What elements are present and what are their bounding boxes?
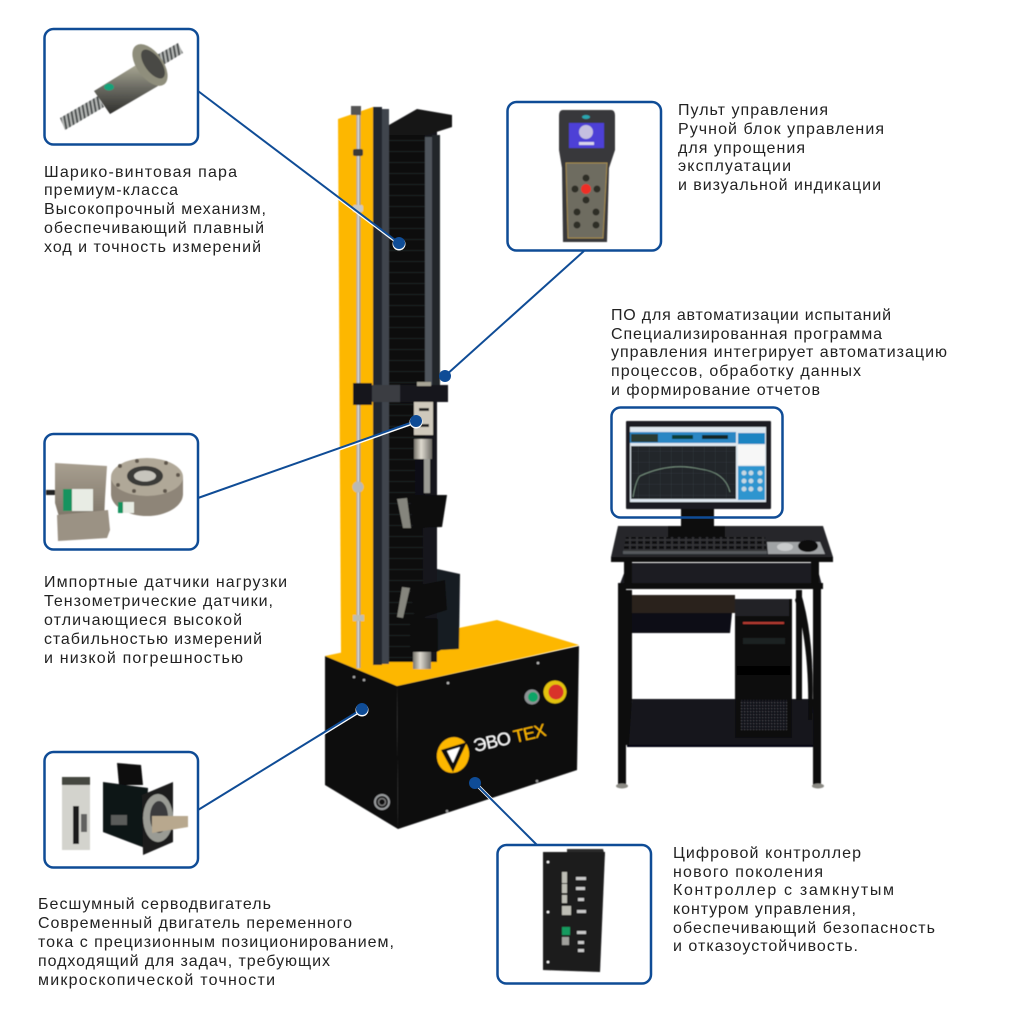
keyboard tray xyxy=(618,562,823,589)
power connector xyxy=(375,795,389,809)
icon: handheld controller xyxy=(559,110,615,242)
lower grip xyxy=(397,580,447,669)
panel: ball screw photo xyxy=(44,29,198,144)
text: software: и формирование отчетов xyxy=(611,382,820,399)
icon: load cells xyxy=(46,458,183,541)
text: load sensors: отличающиеся высокой xyxy=(44,612,242,629)
text: controller: обеспечивающий безопасность xyxy=(673,920,935,937)
text: servo motor xyxy=(38,896,394,989)
logo: ТЕХ xyxy=(511,720,548,747)
panel: load sensor photo xyxy=(44,434,198,550)
text: ball screw: обеспечивающий плавный xyxy=(44,220,264,237)
text: remote control xyxy=(678,102,884,194)
back panel and shelves xyxy=(627,595,813,747)
yellow column xyxy=(338,107,373,668)
panel: remote control photo xyxy=(508,102,661,250)
monitor stand xyxy=(668,509,725,537)
table top xyxy=(611,526,833,562)
text: software: процессов, обработку данных xyxy=(611,363,861,380)
leader: controller xyxy=(469,777,537,845)
button panel xyxy=(524,680,566,704)
text: controller: нового поколения xyxy=(673,864,823,881)
icon: ball screw xyxy=(60,38,183,130)
text: ball screw xyxy=(44,164,266,256)
text: ball screw: ход и точность измерений xyxy=(44,239,261,256)
column frame xyxy=(373,107,440,665)
table legs xyxy=(616,588,824,788)
mouse pad and mouse xyxy=(767,540,825,554)
text: load sensors: и низкой погрешностью xyxy=(44,650,243,667)
text: load sensors: Тензометрические датчики, xyxy=(44,593,273,610)
text: servo motor: тока с прецизионным позиционированием, xyxy=(38,934,394,951)
panel: controller photo xyxy=(498,845,651,984)
guide rod with limit clamps xyxy=(351,106,364,668)
text: load sensors: стабильностью измерений xyxy=(44,631,262,648)
icon: servo drive and motor xyxy=(62,763,188,855)
crosshead xyxy=(353,382,448,405)
text: controller: Цифровой контроллер xyxy=(673,845,861,862)
leader: load sensor xyxy=(198,415,422,500)
text: ball screw: Высокопрочный механизм, xyxy=(44,201,266,218)
leader: ball screw xyxy=(198,91,406,250)
text: servo motor: микроскопической точности xyxy=(38,972,275,989)
text: software: ПО для автоматизации испытаний xyxy=(611,307,891,324)
icon: controller panel xyxy=(543,849,605,972)
text: load sensors: Импортные датчики нагрузки xyxy=(44,574,287,591)
text: controller: Контроллер с замкнутым xyxy=(673,882,894,899)
text: servo motor: Бесшумный серводвигатель xyxy=(38,896,271,913)
text: servo motor: Современный двигатель переменного xyxy=(38,915,352,932)
rear housing xyxy=(437,569,460,652)
testing machine xyxy=(325,106,579,829)
text: ball screw: Шарико-винтовая пара xyxy=(44,164,237,181)
text: software: Специализированная программа xyxy=(611,326,882,343)
monitor xyxy=(626,421,771,509)
text: ball screw: премиум-класса xyxy=(44,182,178,199)
leader: servo motor xyxy=(198,703,368,812)
text: software: управления интегрирует автоматизацию xyxy=(611,344,947,361)
text: remote control: Ручной блок управления xyxy=(678,121,884,138)
logo: ЭВО xyxy=(471,728,513,756)
text: remote control: эксплуатации xyxy=(678,158,791,175)
text: remote control: для упрощения xyxy=(678,140,805,157)
text: controller xyxy=(673,845,935,955)
text: software xyxy=(611,307,947,399)
keyboard xyxy=(623,537,767,554)
workstation table with computer xyxy=(611,421,833,788)
leader: remote control xyxy=(439,251,584,382)
text: controller: контуром управления, xyxy=(673,901,856,918)
text: load sensors xyxy=(44,574,287,667)
text: servo motor: подходящий для задач, требующих xyxy=(38,953,330,970)
top cap xyxy=(389,109,452,135)
text: remote control: Пульт управления xyxy=(678,102,828,119)
computer tower xyxy=(735,599,792,738)
text: remote control: и визуальной индикации xyxy=(678,177,881,194)
text: controller: и отказоустойчивость. xyxy=(673,938,858,955)
panel: monitor highlight xyxy=(612,408,782,518)
logo xyxy=(433,720,548,777)
load cell and upper grip xyxy=(397,402,447,584)
machine base xyxy=(325,620,579,829)
panel: servo motor photo xyxy=(44,752,198,868)
